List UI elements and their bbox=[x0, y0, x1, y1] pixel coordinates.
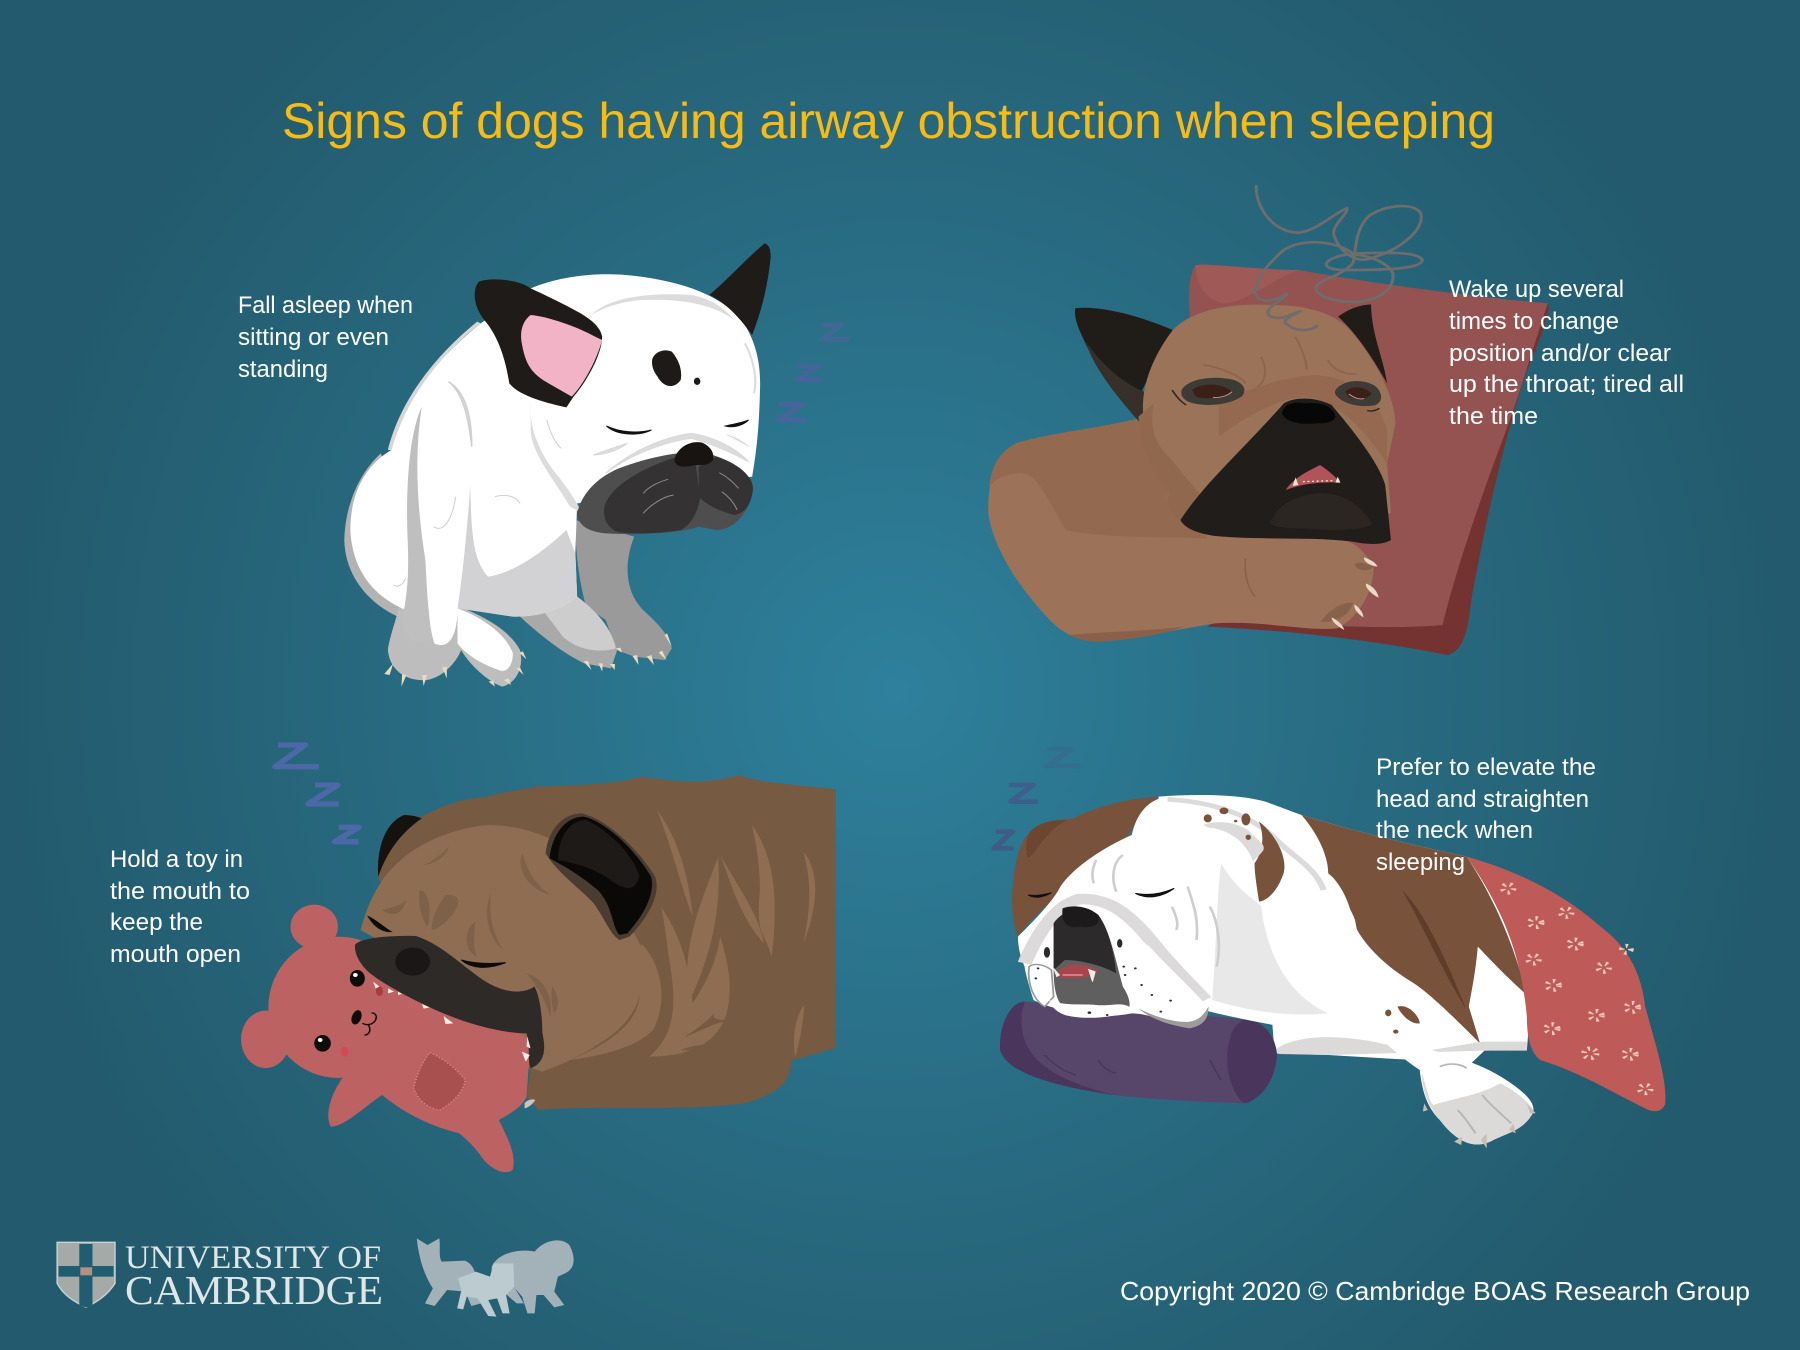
muzzle bbox=[355, 936, 544, 1068]
text: wake up: Wake up several bbox=[1449, 276, 1624, 303]
logo: university of cambridge wordmark bbox=[125, 1240, 383, 1313]
icon: far ear bbox=[378, 815, 422, 877]
text: prefer to elevate: the neck when bbox=[1376, 817, 1533, 844]
text: prefer to elevate: sleeping bbox=[1376, 849, 1465, 876]
text: hold a toy: mouth open bbox=[110, 941, 241, 968]
icon: nose bbox=[674, 442, 713, 467]
text: prefer to elevate: head and straighten bbox=[1376, 786, 1589, 813]
icon: right ear bbox=[709, 243, 771, 335]
icon: closed eyes bbox=[1028, 888, 1174, 897]
illustration: white french bulldog sitting bbox=[344, 243, 771, 687]
text: wake up: the time bbox=[1449, 403, 1538, 430]
mouth bbox=[1286, 465, 1340, 490]
icon: sleep Z letters bbox=[994, 749, 1080, 848]
text: prefer to elevate bbox=[1376, 754, 1596, 876]
icon: claws bbox=[384, 633, 672, 687]
body and arm bbox=[988, 418, 1374, 642]
mouth bbox=[1054, 909, 1130, 1012]
text: fall asleep: sitting or even bbox=[238, 324, 389, 351]
icon: inner ear bbox=[521, 315, 602, 397]
text: copyright: Copyright 2020 © Cambridge BOAS Research Group bbox=[1120, 1276, 1750, 1306]
muzzle freckles bbox=[1034, 939, 1172, 1016]
text: hold a toy bbox=[110, 846, 250, 968]
wrinkles bbox=[382, 847, 558, 1017]
back fur highlights bbox=[657, 810, 815, 1057]
head bbox=[1143, 305, 1396, 517]
dog body bbox=[1159, 795, 1531, 1063]
icon: sleep Z letters (white dog) bbox=[779, 325, 850, 420]
body bbox=[378, 775, 836, 1110]
illustration: pug with teddy bear bbox=[241, 745, 836, 1172]
text: wake up: times to change bbox=[1449, 308, 1619, 335]
icon: bear eyes and nose bbox=[350, 970, 365, 987]
illustration: bulldog on bolster bbox=[994, 749, 1666, 1148]
text: hold a toy: Hold a toy in bbox=[110, 846, 243, 873]
icon: eye patch and spot bbox=[652, 350, 700, 386]
pillow bbox=[1207, 303, 1549, 655]
logo: university of cambridge wordmark: CAMBRIDGE bbox=[125, 1267, 383, 1313]
muzzle bbox=[577, 453, 753, 534]
text: fall asleep bbox=[238, 292, 413, 383]
icon: closed eyes bbox=[606, 420, 749, 434]
blanket bbox=[1467, 857, 1666, 1111]
logo: university of cambridge shield bbox=[57, 1242, 115, 1307]
text: prefer to elevate: Prefer to elevate the bbox=[1376, 754, 1596, 781]
teddy bear bbox=[241, 905, 531, 1172]
icon: near ear bbox=[546, 813, 657, 940]
head bbox=[360, 825, 644, 1072]
icon: nose bbox=[395, 948, 430, 976]
text: wake up bbox=[1449, 276, 1684, 430]
text: hold a toy: the mouth to bbox=[110, 878, 250, 905]
text: fall asleep: Fall asleep when bbox=[238, 292, 413, 319]
text: hold a toy: keep the bbox=[110, 909, 203, 936]
icon: claws bbox=[1332, 557, 1379, 630]
title: Signs of dogs having airway obstruction when sleeping bbox=[282, 93, 1495, 149]
head brown bbox=[1012, 797, 1159, 937]
icon: nostrils bbox=[1282, 403, 1335, 424]
icon: eyes bbox=[1181, 378, 1381, 406]
text: wake up: up the throat; tired all bbox=[1449, 371, 1684, 398]
illustration: fawn dog on pillow bbox=[988, 185, 1549, 655]
ear bbox=[1255, 822, 1284, 902]
text: wake up: position and/or clear bbox=[1449, 340, 1671, 367]
scribble bbox=[1255, 185, 1422, 330]
foreleg and paw bbox=[1319, 957, 1534, 1144]
logo: university of cambridge wordmark: UNIVERSITY OF bbox=[125, 1240, 381, 1276]
icon: left ear bbox=[475, 279, 602, 407]
icon: teeth bbox=[373, 982, 531, 1062]
icon: closed eyes bbox=[368, 917, 506, 967]
text: fall asleep: standing bbox=[238, 356, 328, 383]
bolster pillow bbox=[1000, 1002, 1277, 1103]
logo: dog silhouettes bbox=[417, 1238, 574, 1317]
icon: sleep Z letters bbox=[275, 745, 359, 842]
head white bbox=[1018, 797, 1373, 1042]
lower jaw white bbox=[1029, 964, 1054, 1007]
ears bbox=[1075, 308, 1173, 425]
muzzle bbox=[1180, 399, 1391, 544]
icon: blanket flowers bbox=[1503, 884, 1651, 1093]
muzzle wrinkles bbox=[593, 433, 749, 473]
